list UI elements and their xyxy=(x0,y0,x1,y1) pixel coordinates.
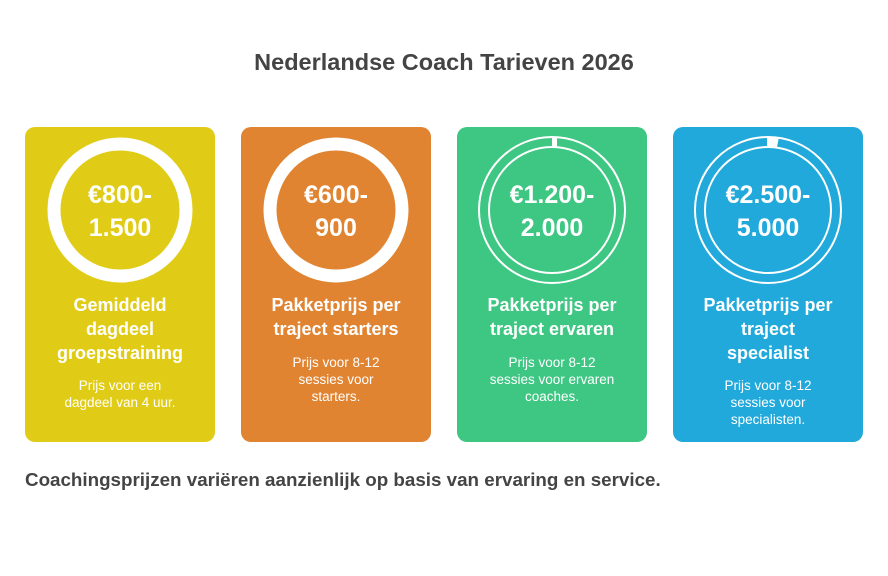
ring: specialist: 5.000 xyxy=(737,214,799,242)
panel: specialist xyxy=(673,127,863,442)
heading: Pakketprijs per traject ervaren xyxy=(487,295,617,339)
heading: Gemiddeld dagdeel groepstraining xyxy=(57,295,183,363)
ring: ervaren: 2.000 xyxy=(521,214,583,242)
ring: ervaren: €1.200- xyxy=(510,181,594,209)
ring: ervaren xyxy=(478,136,626,284)
description: Prijs voor 8-12 sessies voor specialisten. xyxy=(724,378,812,427)
ring: starters: €600- xyxy=(304,181,368,209)
panel: ervaren xyxy=(457,127,647,442)
description: Prijs voor 8-12 sessies voor starters. xyxy=(292,355,380,404)
heading: Pakketprijs per traject specialist xyxy=(703,295,833,363)
heading: Pakketprijs per traject starters xyxy=(271,295,401,339)
ring: groepstraining: 1.500 xyxy=(89,214,151,242)
panel: groepstraining xyxy=(25,127,215,442)
ring: starters xyxy=(264,138,408,282)
ring: groepstraining xyxy=(48,138,192,282)
footer note: Coachingsprijzen variëren aanzienlijk op basis van ervaring en service. xyxy=(25,469,661,490)
ring: starters: 900 xyxy=(315,214,357,242)
description: Prijs voor een dagdeel van 4 uur. xyxy=(64,378,176,410)
title: Nederlandse Coach Tarieven 2026 xyxy=(254,49,634,75)
ring: groepstraining: €800- xyxy=(88,181,152,209)
ring: specialist xyxy=(694,136,842,284)
description: Prijs voor 8-12 sessies voor ervaren coaches. xyxy=(490,355,614,404)
panel: starters xyxy=(241,127,431,442)
ring: specialist: €2.500- xyxy=(726,181,810,209)
